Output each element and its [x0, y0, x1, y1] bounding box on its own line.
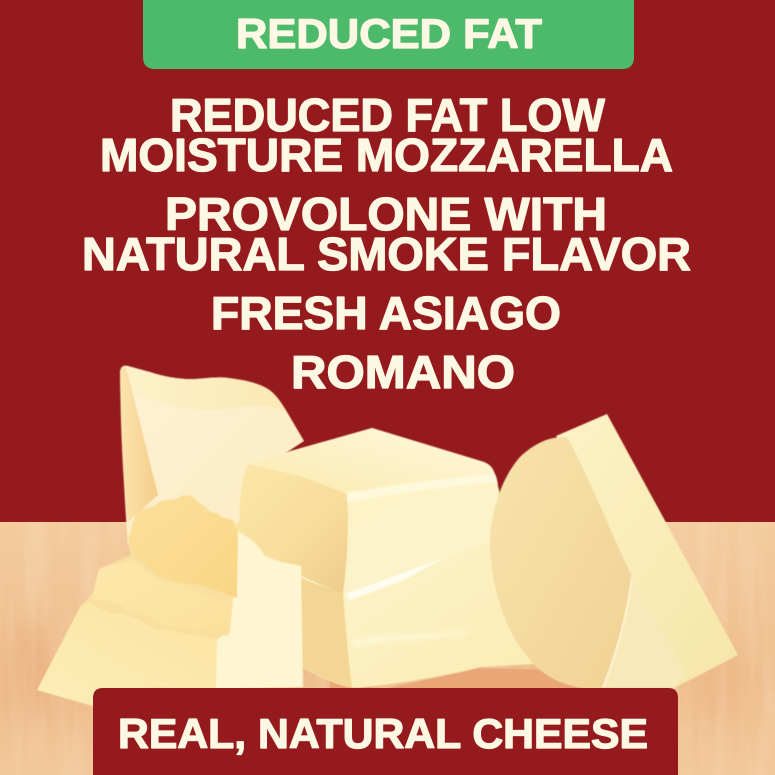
bottom claim box [93, 688, 678, 775]
variety: mozzarella: REDUCED FAT LOW [170, 89, 606, 141]
red background [0, 0, 775, 523]
wedge front face [37, 603, 217, 706]
variety: mozzarella [100, 89, 673, 181]
cheese: crumbled wedge [37, 495, 303, 706]
wedge base silhouette [37, 495, 303, 706]
cheese: lower mozzarella block [295, 530, 534, 688]
variety: provolone: NATURAL SMOKE FLAVOR [82, 228, 691, 280]
claim label: REAL, NATURAL CHEESE [118, 710, 648, 757]
variety: romano: ROMANO [291, 346, 515, 398]
variety: provolone: PROVOLONE WITH [165, 188, 607, 240]
wedge pale side [216, 530, 303, 689]
green banner [143, 0, 634, 69]
variety: asiago: FRESH ASIAGO [211, 287, 561, 339]
cheese: back wedge [120, 366, 304, 545]
wood cutting board [0, 522, 775, 775]
banner label: REDUCED FAT [236, 10, 542, 57]
variety: mozzarella: MOISTURE MOZZARELLA [100, 129, 673, 181]
cheese: upper mozzarella block [230, 428, 500, 594]
cheese variety list [82, 89, 691, 398]
variety: provolone [82, 188, 691, 280]
cheese: provolone wheel [490, 414, 738, 689]
cheese pile [37, 366, 738, 706]
wedge middle break [93, 560, 231, 636]
wedge upper break [128, 495, 238, 598]
